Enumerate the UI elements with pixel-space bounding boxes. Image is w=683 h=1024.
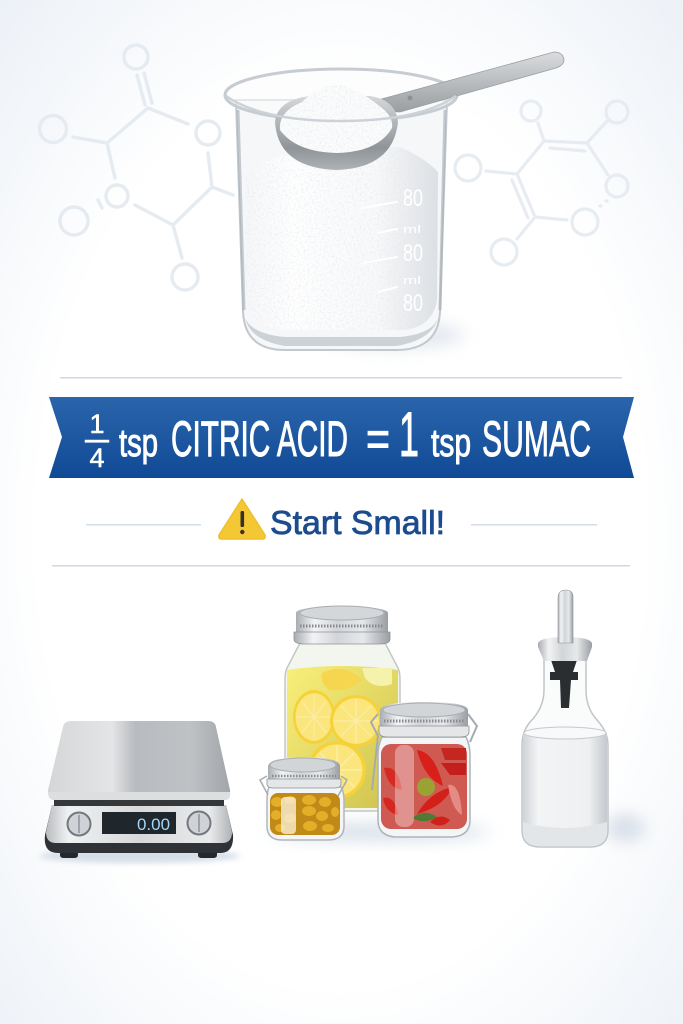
ribbon shape <box>49 397 634 478</box>
top divider <box>60 377 622 378</box>
conversion text: = <box>366 411 390 467</box>
citric acid crystals <box>245 147 438 330</box>
icon: warning triangle <box>219 499 265 539</box>
scale display: 0.00 <box>137 815 170 834</box>
bottom divider <box>52 565 630 566</box>
fraction one quarter: 4 <box>89 443 105 473</box>
jar of chili peppers <box>371 702 477 837</box>
molecule diagram left <box>40 45 233 290</box>
measurement markings: ml <box>403 224 421 236</box>
conversion text: SUMAC <box>482 411 591 467</box>
beaker base glass <box>245 318 438 346</box>
lemon jar glass <box>285 643 400 811</box>
digital kitchen scale <box>40 721 240 863</box>
measurement markings: 80 <box>403 185 423 212</box>
molecule diagram right <box>455 101 628 265</box>
chili jar lid <box>379 702 469 737</box>
golden jar glass <box>267 787 344 840</box>
fraction one quarter: 1 <box>89 409 105 439</box>
conversion text <box>119 400 591 470</box>
conversion text: tsp <box>431 422 471 465</box>
conversion text: tsp <box>119 422 158 465</box>
scale display <box>102 812 176 834</box>
lemon jar liquid <box>287 666 398 808</box>
spout collar <box>538 637 592 661</box>
lemon slices <box>293 668 392 799</box>
beaker rim back <box>225 69 457 121</box>
chili contents <box>381 744 467 829</box>
measurement markings: 80 <box>403 240 423 267</box>
scale knobs <box>68 812 210 836</box>
measurement markings: 80 <box>403 290 423 317</box>
scale base <box>45 805 233 853</box>
spoon bowl <box>275 96 398 170</box>
spoon handle <box>378 52 564 112</box>
beaker side highlights <box>238 110 445 310</box>
chili peppers <box>383 748 466 826</box>
spoonful of acid <box>280 85 392 153</box>
metal spout <box>558 590 573 643</box>
banner: conversion ratio <box>49 397 634 478</box>
jar of golden preserves <box>260 757 347 840</box>
glass bottle with pour spout <box>522 590 608 847</box>
black stopper <box>550 660 578 708</box>
beaker rim front <box>226 96 456 121</box>
golden jar glare <box>281 797 296 834</box>
bottle liquid <box>523 728 607 828</box>
conversion text: 1 <box>399 400 419 470</box>
shadow under jars <box>270 823 490 841</box>
bottle shadow <box>605 814 645 842</box>
fraction one quarter <box>85 409 109 473</box>
scale top plate <box>48 721 230 797</box>
jar of lemons <box>285 606 400 811</box>
bottle glass <box>522 650 608 847</box>
measurement markings <box>362 185 423 317</box>
measurement markings: ml <box>403 275 421 287</box>
chili jar glare <box>395 745 414 827</box>
chili jar glass <box>378 737 470 837</box>
clamp wires <box>371 714 477 790</box>
warning text: Start Small! <box>270 504 445 541</box>
golden jar lid <box>260 757 347 796</box>
golden contents <box>270 793 340 835</box>
scale feet <box>60 850 217 858</box>
conversion text: CITRIC ACID <box>171 411 348 467</box>
beaker body <box>236 100 447 350</box>
lemon jar lid <box>294 606 390 644</box>
beaker with citric acid and measuring spoon <box>225 52 564 350</box>
